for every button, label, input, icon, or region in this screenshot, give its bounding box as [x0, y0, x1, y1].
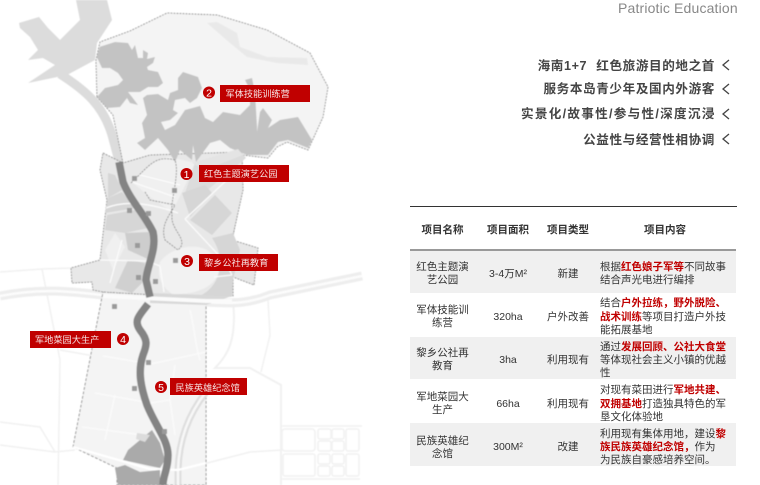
table row 5 [410, 423, 736, 466]
table row 2 [416, 296, 726, 336]
label 1: 红色主题演艺公园 [180, 165, 289, 182]
table row 4: 军地菜园大 [416, 390, 469, 403]
river [60, 74, 120, 165]
positioning statements [521, 58, 729, 147]
sub-area disc [159, 247, 219, 294]
table row 4: 利用现有 [547, 397, 589, 410]
table row 2: 结合户外拉练，野外脱险、 [600, 296, 726, 309]
project table [410, 206, 737, 466]
table row 5: 民族英雄纪 [416, 434, 469, 447]
label 4: 军地菜园大生产: 4 [120, 334, 126, 346]
table row 3: 教育 [432, 359, 453, 372]
table row 3: 等体现社会主义小镇的优越 [600, 353, 726, 366]
highway across city [103, 296, 232, 301]
table row 3: 3ha [499, 354, 517, 366]
label 5: 民族英雄纪念馆 [155, 378, 247, 395]
positioning statements: 海南1+7 红色旅游目的地之首 [538, 58, 715, 73]
label 3: 黎乡公社再教育: 3 [184, 256, 190, 268]
table header: 项目类型 [547, 223, 589, 236]
table row 4: 生产 [432, 403, 453, 416]
lake [19, 0, 112, 83]
table row 3 [410, 337, 736, 379]
table row 5: 利用现有集体用地，建设黎 [600, 427, 726, 440]
light band north [207, 22, 308, 65]
label 4: 军地菜园大生产: 军地菜园大生产 [35, 334, 99, 345]
main river channel [119, 162, 168, 485]
table row 2: 户外改善 [547, 310, 589, 323]
table row 5: 为民族自豪感培养空间。 [600, 453, 716, 466]
table row 1: 结合声光电进行编排 [600, 273, 695, 286]
table row 5: 念馆 [432, 447, 453, 460]
lower region [73, 292, 206, 485]
forest north [97, 42, 163, 108]
label 5: 民族英雄纪念馆: 5 [158, 382, 164, 394]
table row 3: 利用现有 [547, 353, 589, 366]
label 3: 黎乡公社再教育: 黎乡公社再教育 [204, 257, 268, 268]
table row 3: 黎乡公社再 [416, 346, 469, 359]
table row 1: 红色主题演 [416, 260, 469, 273]
city blocks [105, 150, 246, 305]
table row 1: 艺公园 [427, 274, 458, 286]
markers [112, 176, 178, 434]
north region [96, 13, 328, 240]
table row 2: 能拓展基地 [600, 323, 653, 336]
table row 2: 320ha [493, 311, 523, 323]
table row 5: 300M² [493, 441, 523, 453]
label 2: 军体技能训练营: 2 [206, 88, 212, 100]
table row 4: 66ha [496, 398, 520, 410]
positioning statements: 服务本岛青少年及国内外游客 [543, 81, 715, 96]
positioning statements: 实景化/故事性/参与性/深度沉浸 [521, 106, 715, 121]
bottom road [73, 447, 206, 470]
table row 3: 通过发展回顾、公社大食堂 [600, 340, 726, 353]
northern loop area [132, 157, 195, 212]
table header: 项目名称 [422, 223, 464, 236]
table row 4 [416, 383, 726, 423]
label 4: 军地菜园大生产 [30, 331, 129, 348]
background road network [0, 268, 362, 485]
table row 1: 新建 [558, 267, 579, 280]
table header: 项目面积 [487, 224, 529, 236]
dashed inner loop [131, 159, 182, 250]
table row 2: 战术训练等项目打造户外技 [600, 310, 726, 323]
table row 5: 族民族英雄纪念馆，作为 [600, 440, 716, 453]
city region [71, 152, 258, 298]
table row 4: 对现有菜田进行军地共建、 [600, 383, 726, 396]
highway outer [0, 276, 362, 303]
south park area [123, 430, 165, 468]
positioning statements: 公益性与经营性相协调 [583, 132, 715, 147]
label 3: 黎乡公社再教育 [181, 254, 278, 271]
heading: Patriotic Education: Patriotic Education [618, 0, 738, 16]
table header: 项目内容 [644, 223, 686, 236]
table row 3: 性 [600, 366, 610, 379]
label 1: 红色主题演艺公园: 红色主题演艺公园 [204, 168, 278, 179]
table row 4: 双拥基地打造独具特色的军 [600, 397, 726, 410]
white city roads [82, 165, 243, 440]
label 1: 红色主题演艺公园: 1 [184, 169, 190, 181]
table row 5: 改建 [558, 440, 579, 453]
table row 1 [410, 251, 736, 293]
label 2: 军体技能训练营 [203, 85, 310, 102]
table row 1: 3-4万M² [489, 268, 527, 280]
table row 2: 军体技能训 [416, 303, 469, 316]
table row 2: 练营 [432, 316, 453, 329]
table row 1: 根据红色娘子军等不同故事 [600, 260, 726, 273]
label 2: 军体技能训练营: 军体技能训练营 [226, 88, 290, 99]
north light park over forest [192, 149, 243, 170]
base map [0, 0, 362, 485]
table header [422, 223, 686, 236]
table row 4: 垦文化体验地 [600, 410, 663, 423]
label 5: 民族英雄纪念馆: 民族英雄纪念馆 [176, 382, 240, 393]
south main road [178, 392, 206, 485]
